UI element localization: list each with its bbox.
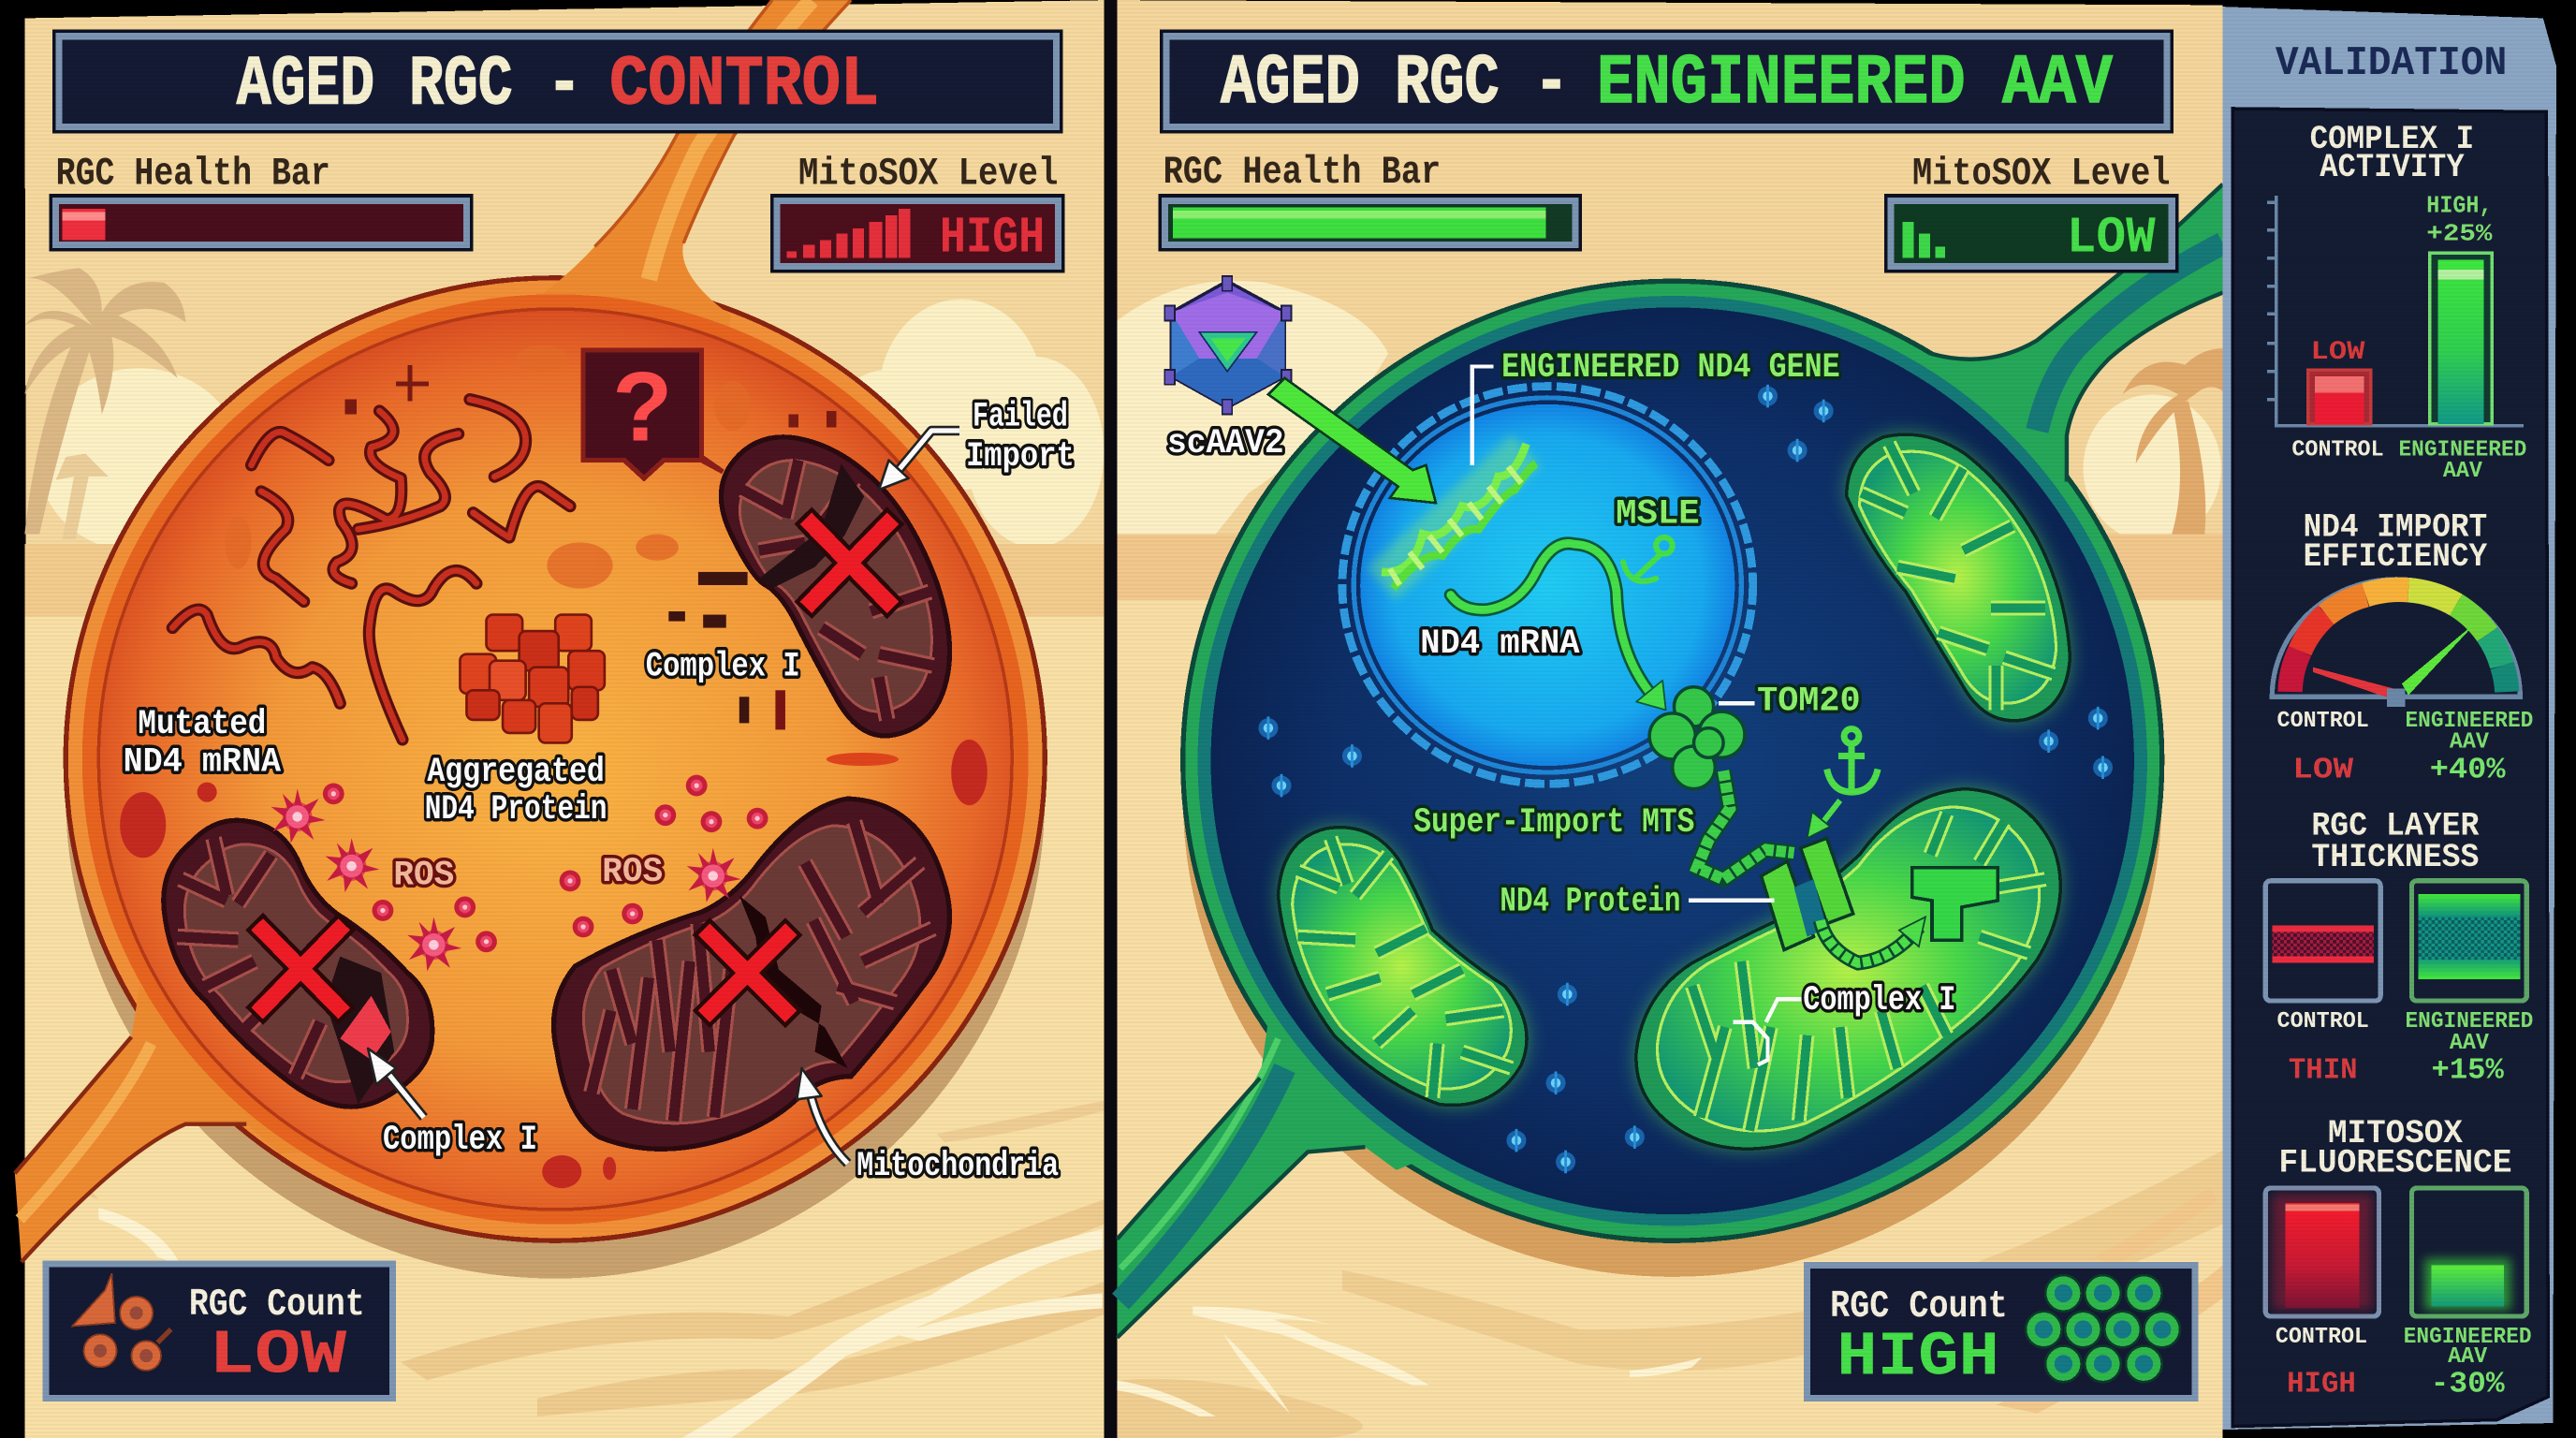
title: aged RGC engineered AAV: [1162, 31, 2172, 132]
labels: control cell: ND4 Protein: [425, 790, 607, 829]
cell shadow: [1183, 314, 2162, 1277]
chart: ND4 import efficiency gauge: +40%: [2430, 754, 2506, 786]
aggregated ND4 protein cluster: [460, 615, 605, 742]
chart: MitoSOX fluorescence: HIGH: [2287, 1369, 2356, 1401]
labels: engineered cell: TOM20: [1757, 682, 1861, 721]
labels: control cell: ROS: [602, 853, 663, 892]
background: clouds: [37, 300, 1104, 552]
health bar: engineered: RGC Health Bar: [1164, 150, 1441, 195]
complex I T-shape: [1912, 868, 1998, 940]
icon: palm tree silhouette: [24, 268, 185, 535]
axon: lower left: [1117, 986, 1445, 1338]
small debris: [345, 365, 836, 427]
mitochondrion: upper right, healthy: [1847, 434, 2070, 721]
labels: control cell: [124, 398, 1075, 1186]
chart: ND4 import efficiency gauge: EFFICIENCY: [2304, 538, 2487, 576]
chart: MitoSOX fluorescence: AAV: [2448, 1344, 2488, 1370]
labels: control cell: Aggregated: [427, 753, 605, 792]
chart: MitoSOX fluorescence: MITOSOX: [2328, 1115, 2464, 1152]
labels: control cell: Import: [966, 437, 1075, 477]
MitoSOX level: high: MitoSOX Level: [798, 152, 1058, 197]
chart: ND4 import efficiency gauge: AAV: [2450, 730, 2490, 756]
labels: control cell: Failed: [973, 398, 1068, 437]
background: horizon band: [24, 544, 1104, 616]
chart: MitoSOX fluorescence: FLUORESCENCE: [2278, 1145, 2512, 1182]
red X marks: [263, 524, 887, 1011]
gene leader line: [1472, 367, 1493, 465]
chart: RGC layer thickness: ENGINEERED: [2405, 1009, 2533, 1034]
mitochondrion: lower left, damaged: [164, 820, 432, 1107]
RGC count: high: RGC Count: [1830, 1285, 2008, 1328]
title: aged RGC engineered AAV: AGED RGC -: [1221, 43, 1569, 124]
labels: control cell: Mutated: [138, 705, 266, 744]
labels: engineered cell: ND4 mRNA: [1420, 624, 1580, 664]
divider: [1104, 0, 1117, 1438]
MitoSOX level: low: MitoSOX Level: [1912, 152, 2170, 197]
RGC count: low: [46, 1264, 392, 1399]
background: clouds: [1117, 281, 2221, 542]
labels: control cell: ND4 mRNA: [124, 742, 282, 782]
labels: engineered cell: Complex I: [1803, 981, 1955, 1020]
TOM20 receptor: [1649, 687, 1745, 789]
super-import MTS bead chain: [1697, 770, 1794, 879]
title: aged RGC control: [54, 31, 1061, 132]
cell body: [82, 294, 1029, 1225]
mutated ND4 mRNA squiggles: [172, 400, 570, 740]
chart: RGC layer thickness: THICKNESS: [2311, 839, 2479, 876]
background: sand streaks: [1117, 1151, 2223, 1438]
chart: MitoSOX fluorescence: ENGINEERED: [2404, 1325, 2532, 1350]
cell membrane: [1183, 281, 2162, 1240]
mitochondrion: large, healthy: [1636, 789, 2060, 1149]
health bar: control: RGC Health Bar: [56, 152, 330, 197]
chart: complex I activity: LOW: [2311, 338, 2365, 367]
MitoSOX level: low: [1886, 152, 2177, 271]
labels: control cell: Complex I: [646, 647, 800, 686]
question box: [583, 350, 723, 478]
chart: MitoSOX fluorescence: CONTROL: [2276, 1325, 2367, 1350]
MitoSOX level: low: LOW: [2067, 211, 2156, 268]
chart: ND4 import efficiency gauge: [2272, 508, 2533, 786]
engineered ND4 gene helix: [1382, 444, 1536, 588]
health bar: engineered: [1160, 150, 1580, 250]
mitochondrion: upper right, damaged: [721, 437, 950, 736]
title: aged RGC engineered AAV: ENGINEERED AAV: [1597, 43, 2114, 124]
mitochondrion: lower right, damaged: [554, 799, 949, 1149]
chart: ND4 import efficiency gauge: ENGINEERED: [2405, 709, 2533, 734]
title: aged RGC control: CONTROL: [609, 45, 879, 125]
labels: engineered cell: [1167, 348, 1955, 1020]
panel: validation sidebar: [2223, 7, 2556, 1430]
axon: lower left: [15, 986, 312, 1262]
cytoplasm blotches: [225, 345, 751, 588]
labels: engineered cell: scAAV2: [1167, 424, 1284, 463]
arrow: AAV into nucleus: [1268, 378, 1436, 503]
chart: complex I activity: AAV: [2443, 459, 2483, 484]
cell membrane: [66, 278, 1045, 1240]
heading: validation: VALIDATION: [2276, 40, 2507, 87]
chain arrow into complex I: [1821, 917, 1925, 963]
ND4 mRNA: [1451, 537, 1673, 710]
RGC count: high: [1808, 1266, 2195, 1399]
chart: complex I activity: ENGINEERED: [2398, 437, 2526, 462]
chart: complex I activity: +25%: [2426, 219, 2493, 247]
MitoSOX level: high: HIGH: [940, 211, 1045, 268]
chart: RGC layer thickness: THIN: [2289, 1054, 2358, 1087]
panel: control: [15, 0, 1104, 1438]
sparkles: [1258, 385, 2113, 1173]
labels: engineered cell: Super-Import MTS: [1413, 803, 1694, 843]
icon: scAAV2 capsid: [1164, 276, 1292, 414]
chart: RGC layer thickness: RGC LAYER: [2311, 808, 2480, 845]
icon: small palm: [56, 454, 109, 539]
chart: RGC layer thickness: +15%: [2432, 1054, 2504, 1087]
axon: top: [493, 0, 851, 361]
chart: complex I activity: HIGH,: [2426, 192, 2492, 220]
MitoSOX level: high: [772, 152, 1063, 271]
anchor icon: [1808, 729, 1878, 838]
ND4 protein channel: [1761, 838, 1853, 950]
chart: ND4 import efficiency gauge: ND4 IMPORT: [2304, 508, 2487, 546]
nucleus: [1342, 387, 1753, 784]
cell body: [1197, 296, 2147, 1225]
mitochondrion: lower left, healthy: [1278, 828, 1527, 1105]
background: sand streaks: [30, 1101, 1104, 1438]
labels: engineered cell: ENGINEERED ND4 GENE: [1501, 348, 1840, 388]
labels: control cell: Mitochondria: [856, 1147, 1059, 1186]
ROS bursts: [271, 775, 768, 971]
chart: RGC layer thickness: [2265, 808, 2533, 1087]
chart: complex I activity: COMPLEX I: [2310, 121, 2474, 158]
chart: complex I activity: ACTIVITY: [2320, 149, 2465, 186]
RGC count: high: HIGH: [1837, 1322, 1999, 1393]
chart: MitoSOX fluorescence: [2265, 1115, 2532, 1401]
labels: control cell: Complex I: [383, 1121, 537, 1160]
background: desert sky: [24, 0, 1104, 1438]
cell shadow: [66, 313, 1045, 1279]
labels: engineered cell: MSLE: [1616, 494, 1700, 534]
chart: ND4 import efficiency gauge: LOW: [2292, 754, 2353, 786]
labels: control cell: ROS: [393, 856, 454, 895]
chart: complex I activity: CONTROL: [2291, 437, 2384, 462]
chart: RGC layer thickness: CONTROL: [2277, 1009, 2369, 1034]
complex I small chain and leader: [1734, 999, 1802, 1064]
chart: ND4 import efficiency gauge: CONTROL: [2277, 709, 2369, 734]
arrows: white pointers: [368, 431, 959, 1164]
RGC count: low: RGC Count: [189, 1284, 365, 1327]
title: aged RGC control: AGED RGC -: [237, 45, 581, 125]
icon: palm tree silhouette: [2123, 348, 2223, 535]
panel: engineered AAV: [1117, 0, 2223, 1438]
background: horizon band: [1117, 535, 2223, 600]
axon: upper right: [1889, 184, 2223, 526]
leaders: [1689, 703, 1775, 901]
RGC count: low: LOW: [209, 1321, 346, 1392]
background: desert sky: [1117, 0, 2223, 1438]
chart: complex I activity: [2267, 121, 2526, 484]
health bar: control: [51, 152, 472, 250]
question box: ?: [612, 353, 672, 462]
chart: MitoSOX fluorescence: -30%: [2431, 1369, 2505, 1401]
chart: RGC layer thickness: AAV: [2450, 1031, 2490, 1056]
labels: engineered cell: ND4 Protein: [1500, 882, 1680, 921]
